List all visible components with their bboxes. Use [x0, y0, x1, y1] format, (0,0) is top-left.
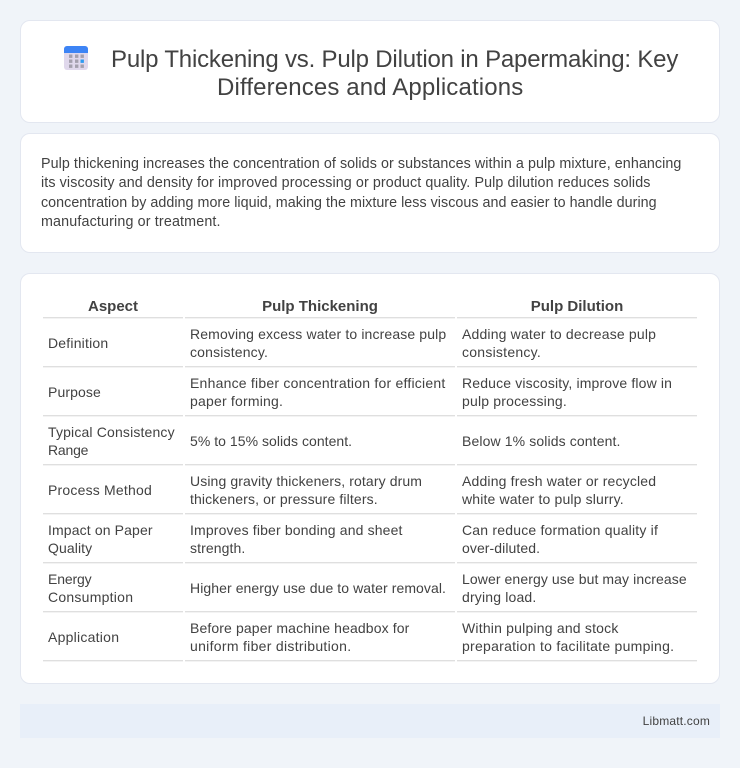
- comparison table: Before paper machine headbox for: [190, 620, 409, 636]
- comparison table: strength.: [190, 540, 245, 556]
- row: Typical Consistency Range: Range: [48, 442, 88, 458]
- intro text panel: [20, 133, 720, 253]
- comparison table: Within pulping and stock: [462, 620, 619, 636]
- row: Energy Consumption: Consumption: [48, 589, 133, 605]
- row: Impact on Paper Quality: Impact on Paper: [48, 522, 153, 538]
- row: Energy Consumption: [48, 571, 133, 605]
- row: Energy Consumption: Energy: [48, 571, 91, 587]
- comparison table: Adding water to decrease pulp: [462, 326, 656, 342]
- row: Purpose: Purpose: [48, 384, 101, 400]
- comparison table panel: [20, 273, 720, 684]
- comparison table: Below 1% solids content.: [462, 433, 621, 449]
- header panel: [20, 20, 720, 123]
- comparison table: Reduce viscosity, improve flow in: [462, 375, 672, 391]
- row: Process Method: Process Method: [48, 482, 152, 498]
- comparison table: consistency.: [462, 344, 541, 360]
- comparison table: white water to pulp slurry.: [462, 491, 624, 507]
- title: [111, 46, 678, 101]
- comparison table: Lower energy use but may increase: [462, 571, 687, 587]
- comparison table: over-diluted.: [462, 540, 540, 556]
- comparison table: [43, 298, 697, 662]
- footer source text: Libmatt.com: [643, 714, 710, 728]
- title: Pulp Thickening vs. Pulp Dilution in Papermaking: Key: [111, 46, 678, 73]
- row: Impact on Paper Quality: [48, 522, 153, 556]
- comparison table: uniform fiber distribution.: [190, 638, 351, 654]
- intro paragraph: its viscosity and density for improved processing or product quality. Pulp dilution reduces solids: [41, 175, 651, 191]
- row: Impact on Paper Quality: Quality: [48, 540, 92, 556]
- comparison table: consistency.: [190, 344, 268, 360]
- column header: Pulp Thickening: Pulp Thickening: [262, 298, 378, 315]
- column header: Aspect: Aspect: [88, 298, 138, 315]
- comparison table: paper forming.: [190, 393, 283, 409]
- intro paragraph: concentration by adding more liquid, making the mixture less viscous and easier to handle during: [41, 195, 657, 211]
- comparison table: Using gravity thickeners, rotary drum: [190, 473, 422, 489]
- intro paragraph: [41, 156, 681, 230]
- column header: Pulp Dilution: Pulp Dilution: [531, 298, 623, 315]
- footer bar: [20, 704, 720, 738]
- comparison table: Enhance fiber concentration for efficient: [190, 375, 445, 391]
- row: Application: Application: [48, 629, 119, 645]
- row: Typical Consistency Range: [48, 424, 175, 458]
- comparison table: thickeners, or pressure filters.: [190, 491, 378, 507]
- comparison table: 5% to 15% solids content.: [190, 433, 352, 449]
- comparison table: pulp processing.: [462, 393, 567, 409]
- comparison table: drying load.: [462, 589, 536, 605]
- comparison table: Removing excess water to increase pulp: [190, 326, 446, 342]
- comparison table: Can reduce formation quality if: [462, 522, 658, 538]
- comparison table: preparation to facilitate pumping.: [462, 638, 674, 654]
- row: Typical Consistency Range: Typical Consistency: [48, 424, 175, 440]
- row: Definition: Definition: [48, 335, 108, 351]
- intro paragraph: Pulp thickening increases the concentration of solids or substances within a pulp mixture, enhancing: [41, 156, 681, 172]
- intro paragraph: manufacturing or treatment.: [41, 214, 221, 230]
- comparison table: Higher energy use due to water removal.: [190, 580, 446, 596]
- icon: calendar: [64, 46, 88, 70]
- title: Differences and Applications: [217, 74, 523, 101]
- comparison table: Adding fresh water or recycled: [462, 473, 656, 489]
- comparison table: Improves fiber bonding and sheet: [190, 522, 403, 538]
